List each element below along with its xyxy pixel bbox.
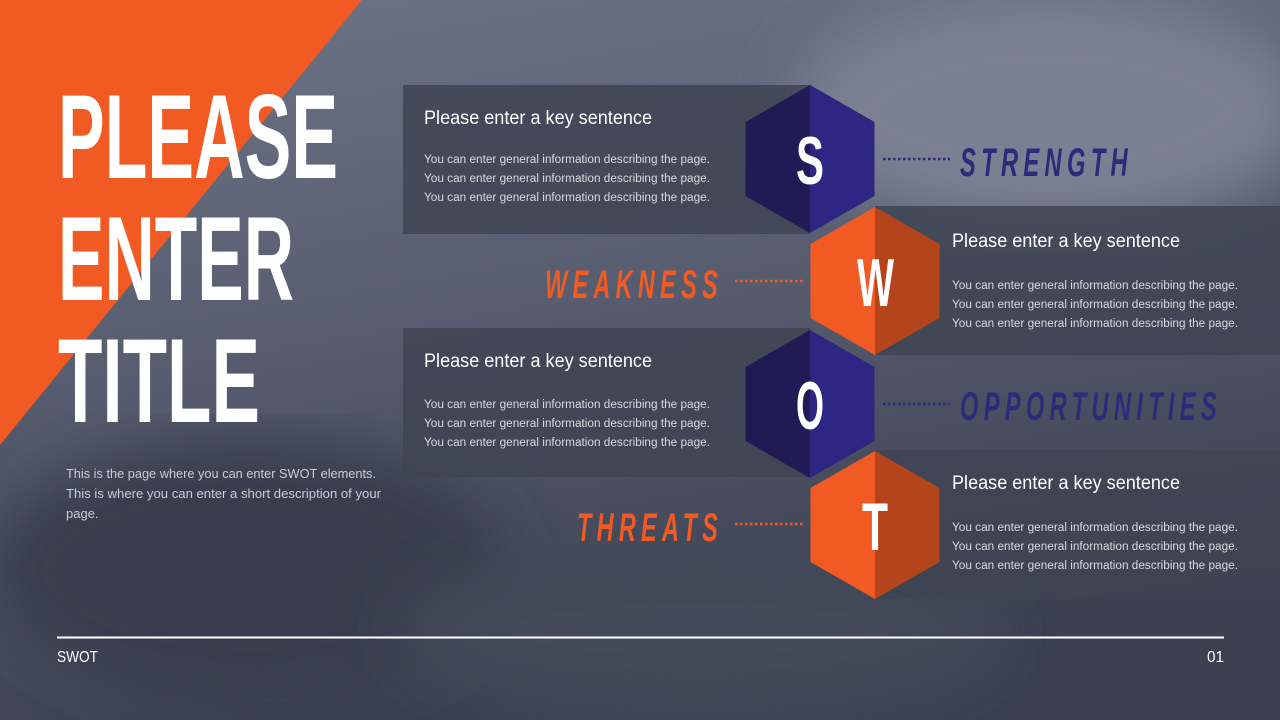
panel: opportunities: You can enter general information describing the page. [424,418,710,430]
panel: strength: You can enter general information describing the page. [424,173,710,185]
description: page. [66,506,99,521]
footer: 01 [1207,649,1224,666]
panel: weakness: You can enter general information describing the page. [952,280,1238,292]
panel: strength: You can enter general information describing the page. [424,154,710,166]
title [58,70,338,448]
connector: strength [883,158,950,160]
hexagon O: O [796,368,824,444]
title: TITLE [58,314,260,448]
panel: weakness: Please enter a key sentence [952,231,1180,252]
hexagon S [746,85,874,233]
panel: opportunities: You can enter general information describing the page. [424,399,710,411]
title: PLEASE [58,70,338,204]
panel: threats: You can enter general information describing the page. [952,522,1238,534]
panel: strength [403,85,810,234]
hexagon W: W [857,245,894,321]
panel: opportunities [403,328,810,477]
orange corner triangle [0,0,362,445]
label: weakness: WEAKNESS [545,263,723,307]
hexagon S: S [796,123,824,199]
panel: strength: You can enter general information describing the page. [424,192,710,204]
panel: threats: Please enter a key sentence [952,473,1180,494]
panel: weakness [875,206,1280,355]
label: strength: STRENGTH [960,141,1133,185]
panel: opportunities: Please enter a key sentence [424,351,652,372]
hexagon W [810,207,940,355]
connector: threats [735,523,803,525]
connector: weakness [735,280,803,282]
description: This is the page where you can enter SWOT elements. [66,466,376,481]
footer: SWOT [57,649,98,666]
hexagon T [810,451,940,599]
panel: threats [875,450,1280,599]
hexagon O [746,330,874,478]
description [66,466,382,521]
panel: strength: Please enter a key sentence [424,108,652,129]
footer [57,638,1224,666]
label: threats: THREATS [577,506,723,550]
connector: opportunities [883,403,950,405]
description: This is where you can enter a short description of your [66,486,382,501]
title: ENTER [58,192,294,326]
hexagon T: T [862,489,888,565]
panel: opportunities: You can enter general information describing the page. [424,437,710,449]
panel: threats: You can enter general information describing the page. [952,560,1238,572]
panel: weakness: You can enter general information describing the page. [952,318,1238,330]
panel: threats: You can enter general information describing the page. [952,541,1238,553]
panel: weakness: You can enter general information describing the page. [952,299,1238,311]
